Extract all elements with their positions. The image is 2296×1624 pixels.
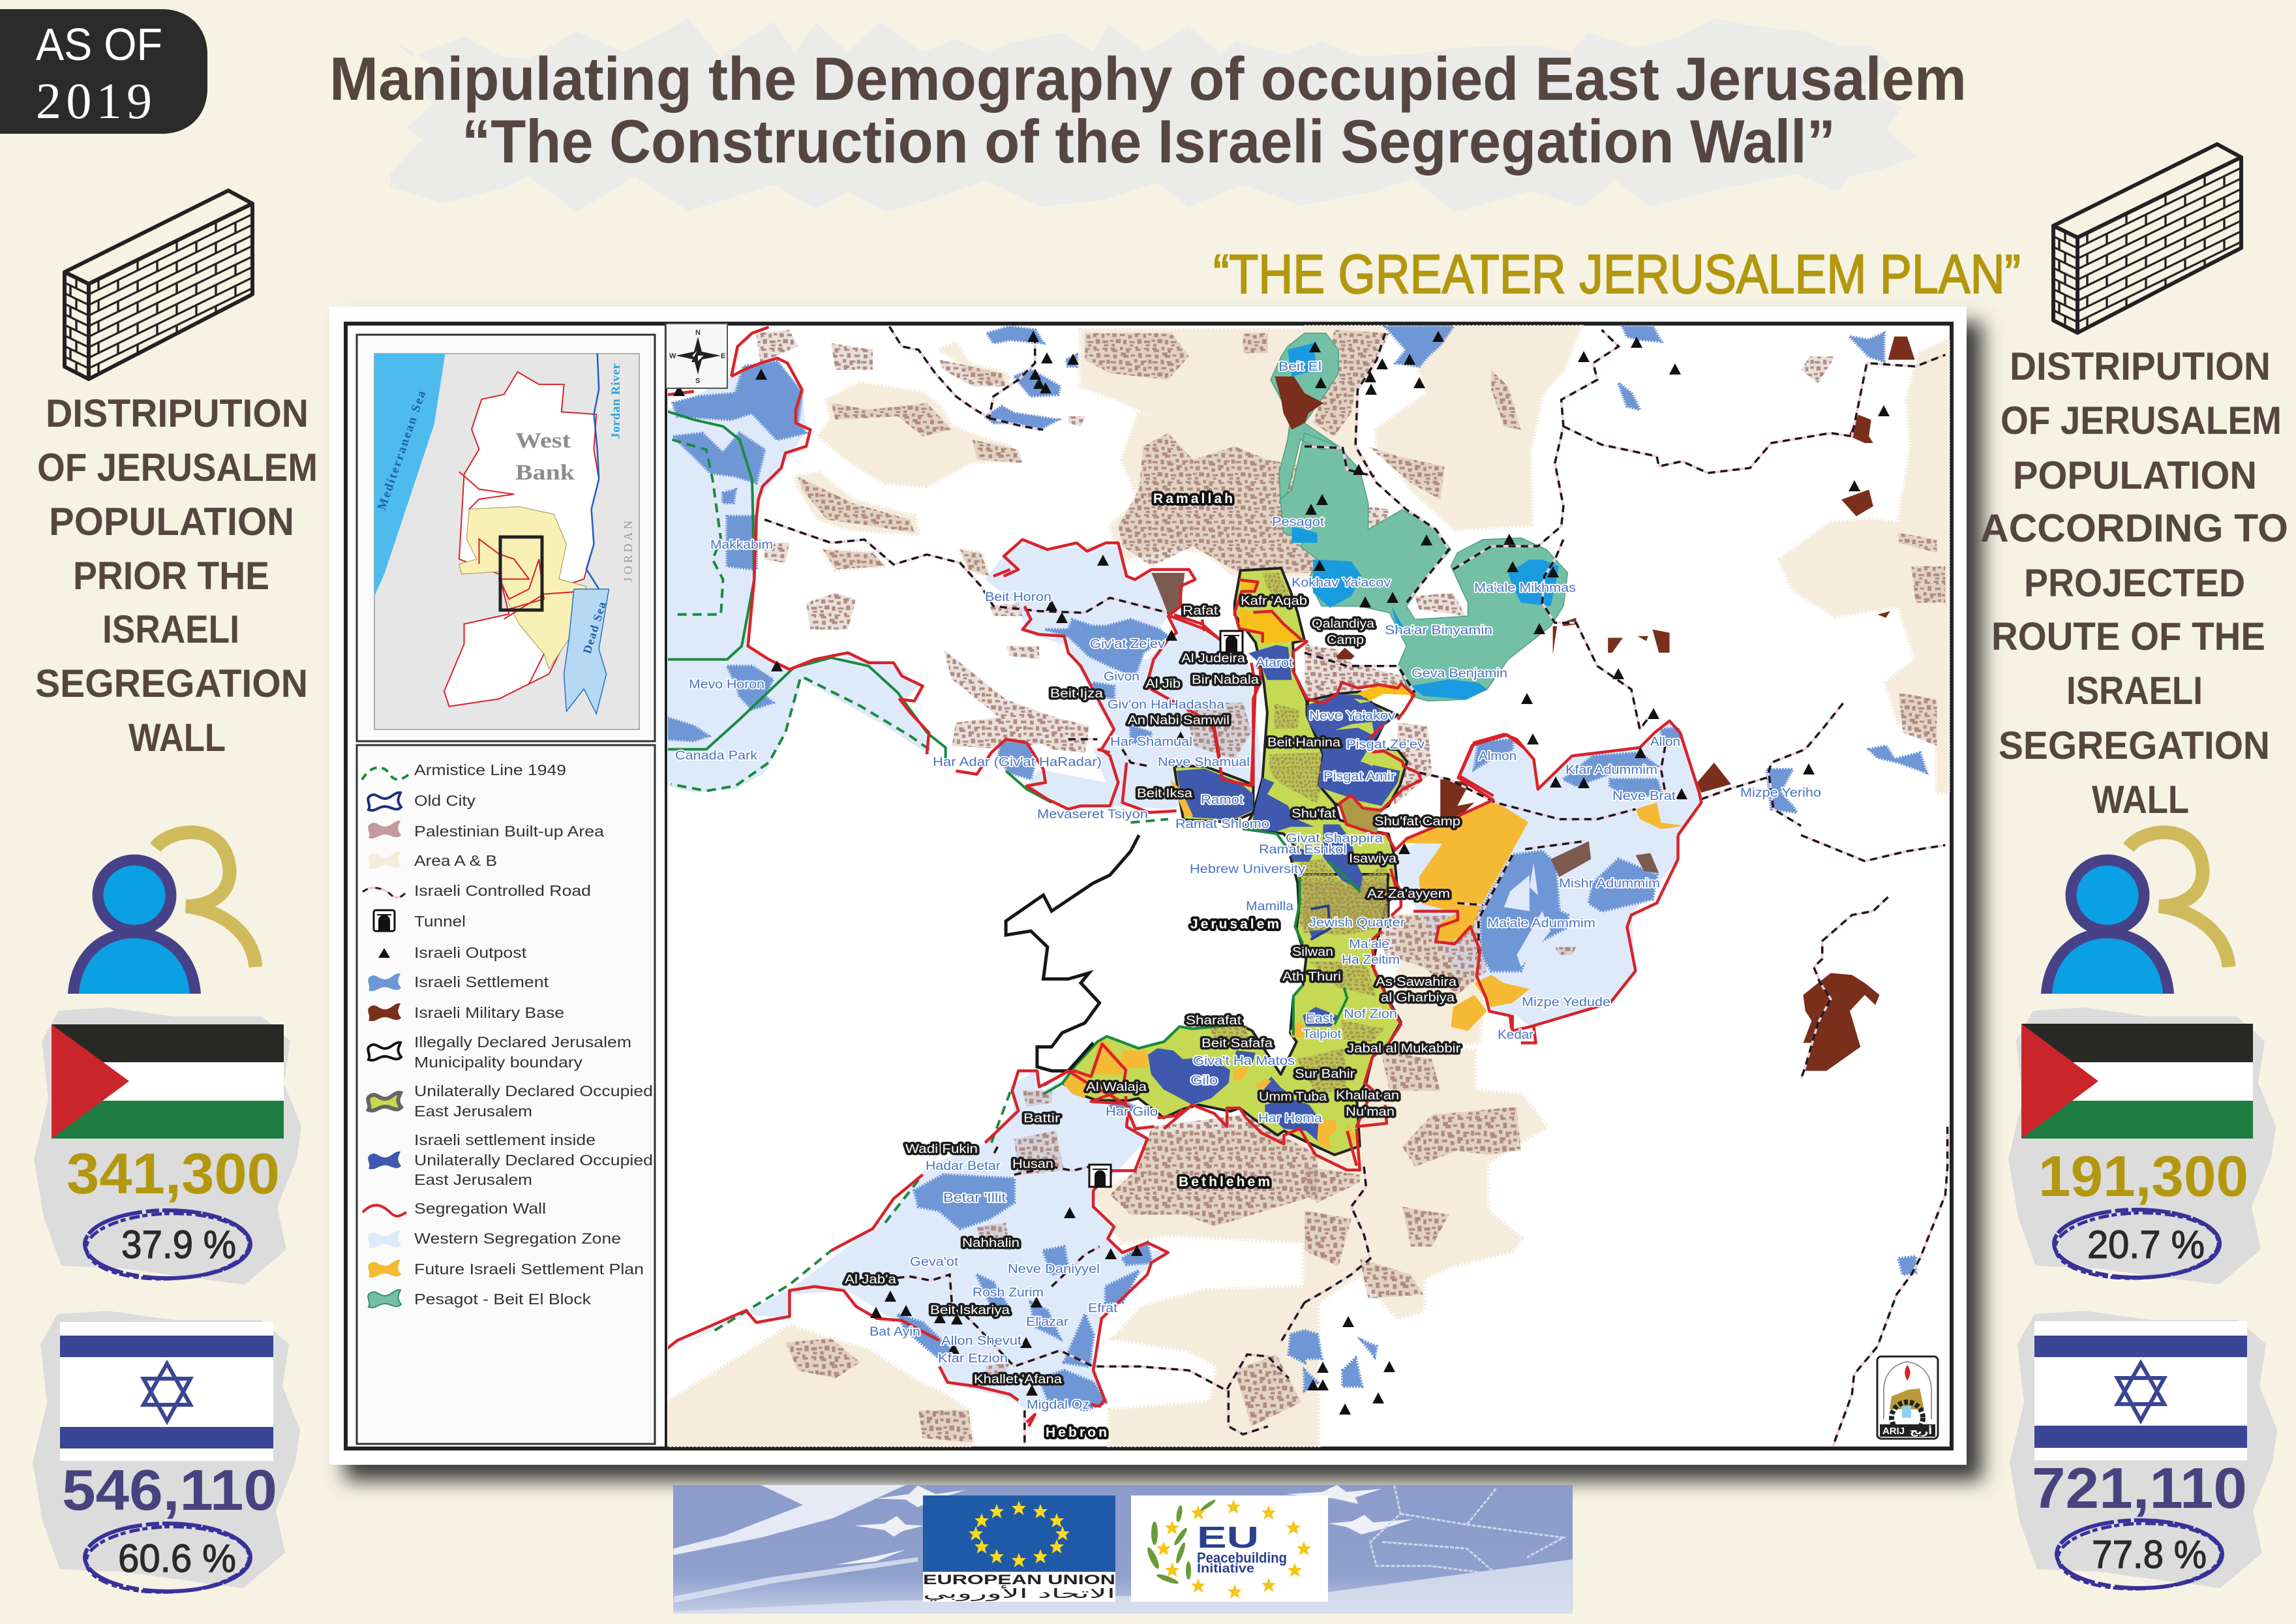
logo: EU Peacebuilding Initiative: Peacebuilding [1197, 1550, 1287, 1566]
legend: municipality [368, 1034, 631, 1071]
heading: left population block [35, 391, 318, 759]
legend: east Jerusalem: East Jerusalem [414, 1103, 532, 1120]
map: Palestinian locality labels: Al Jab'a [845, 1273, 896, 1287]
logo: European Union flag: الاتحاد الأوروبي [923, 1586, 1115, 1602]
map: settlement labels: Givon [1104, 670, 1140, 684]
map: future settlement plans [1063, 580, 1684, 1148]
map: Palestinian locality labels: Beit Iksa [1137, 787, 1192, 801]
map: settlement labels: Talpiot [1303, 1028, 1342, 1041]
map: settlement labels: Bat Ayin [869, 1325, 920, 1339]
legend: outpost [378, 944, 527, 961]
legend: old city: Old City [414, 792, 476, 809]
legend: Pesagot: Pesagot - Beit El Block [414, 1291, 592, 1308]
map: Israeli outposts [673, 331, 1890, 1415]
map: settlement labels: Allon [1650, 735, 1680, 749]
map: settlement labels: El'azar [1026, 1315, 1069, 1329]
map: city labels: Hebron [1046, 1425, 1107, 1440]
map: Pesagot - Beit El block [1271, 333, 1567, 701]
percent ring: 60.6 % [118, 1537, 236, 1580]
map: Palestinian locality labels: An Nabi Samwil [1128, 714, 1230, 728]
map: Palestinian locality labels: Qalandiya [1312, 617, 1374, 631]
icon: people left [68, 833, 256, 994]
map: western segregation zone [667, 360, 1701, 1411]
heading: right population block: ISRAELI [2066, 669, 2203, 712]
map: Palestinian locality labels: Sur Bahir [1295, 1067, 1355, 1081]
map: city labels [1046, 491, 1279, 1440]
date badge [0, 9, 207, 134]
icon: ARIJ logo: أريج [1910, 1425, 1932, 1437]
map card [329, 307, 1967, 1465]
heading: right population block: ACCORDING TO [1980, 506, 2288, 550]
map: settlement labels: Efrat [1088, 1302, 1118, 1315]
map: settlement labels: Giva't Ha Matos [1193, 1054, 1295, 1068]
map: Palestinian locality labels: Battir [1023, 1112, 1061, 1126]
map: settlement labels: Neve Shamual [1158, 756, 1250, 769]
map: settlement labels: Kokhav Ya'acov [1292, 576, 1391, 590]
map: settlement labels: Ramot [1201, 793, 1244, 807]
map [668, 325, 1950, 1582]
icon: brick wall left [65, 191, 252, 379]
number: Israeli population prior: 546,110 [62, 1458, 277, 1522]
panel: right Palestinian population [2008, 1007, 2276, 1285]
legend: area A and B [368, 851, 497, 869]
map: settlement labels: Giv'at Ze'ev [1090, 637, 1166, 651]
percent ring [85, 1524, 250, 1595]
map: Palestinian locality labels: Jabal al Mukabbir [1347, 1042, 1461, 1056]
icon: tunnel near Husan [1089, 1165, 1111, 1187]
map: Palestinian locality labels: Az Za'ayyem [1367, 887, 1450, 901]
percent ring [2054, 1210, 2220, 1281]
map: Palestinian locality labels: Shu'fat [1292, 807, 1337, 821]
title: “The Construction of the Israeli Segregation Wall” [462, 107, 1835, 176]
legend: settlement: Israeli Settlement [414, 973, 549, 990]
heading: left population block: DISTRIPUTION [46, 391, 309, 435]
icon: ARIJ logo [1877, 1356, 1938, 1439]
map: city labels: Jerusalem [1190, 917, 1279, 932]
legend: western zone [368, 1230, 621, 1248]
Jerusalem governorate [459, 507, 586, 669]
panel: right Israeli population [2010, 1311, 2277, 1591]
legend: controlled road [363, 882, 591, 899]
legend: wall [363, 1200, 546, 1217]
map: settlement labels: Pisgat Ze'ev [1346, 738, 1425, 752]
map: Palestinian locality labels: Beit Ijza [1050, 687, 1104, 701]
map: Palestinian locality labels: Khallet 'Afana [974, 1373, 1062, 1387]
map: settlement labels: Migdal Oz [1027, 1398, 1089, 1412]
date badge: AS OF [36, 19, 162, 70]
legend: western zone: Western Segregation Zone [414, 1230, 621, 1247]
legend: future plan: Future Israeli Settlement Plan [414, 1261, 644, 1278]
legend: armistice [362, 761, 566, 780]
map: settlement labels: Hadar Betar [926, 1159, 1001, 1173]
heading: right population block: SEGREGATION [1999, 724, 2270, 767]
map: Palestinian locality labels: Beit Safafa [1201, 1037, 1273, 1050]
map: Palestinian locality labels: Husan [1012, 1157, 1053, 1171]
heading: left population block: SEGREGATION [35, 662, 308, 705]
flag: Israel [2034, 1321, 2247, 1460]
panel: inset locator map: Mediterranean Sea [375, 389, 429, 512]
panel: inset locator map: Bank [515, 461, 575, 485]
map: Palestinian locality labels: Wadi Fukin [905, 1142, 978, 1156]
map: Palestinian locality labels: Al Walaja [1086, 1080, 1147, 1094]
Dead Sea [564, 589, 609, 714]
map: settlement labels: Atarot [1256, 656, 1293, 670]
heading: left population block: WALL [128, 716, 226, 759]
map: settlement labels: Mevaseret Tsiyon [1037, 808, 1148, 821]
map: Palestinian locality labels: Beit Hanina [1267, 736, 1340, 750]
flag: Palestine [52, 1024, 284, 1139]
map: Palestinian locality labels: Nahhalin [962, 1236, 1020, 1250]
map: light green patch inside Neve Ya'akov [1335, 699, 1400, 769]
heading: left population block: OF JERUSALEM [37, 446, 318, 489]
map: settlement labels: Allon Shevut [941, 1334, 1022, 1348]
wall route [459, 472, 579, 684]
legend: tunnel [374, 910, 466, 931]
map: segregation wall [667, 327, 1701, 1426]
legend: Pesagot [368, 1290, 592, 1308]
panel: inset locator map: Dead Sea [581, 600, 609, 655]
map: settlement labels: Neve Brat [1612, 789, 1676, 803]
heading: right population block: ROUTE OF THE [1991, 615, 2265, 658]
heading: left population block: PRIOR THE [73, 554, 269, 598]
map: settlement labels: Makkabim [710, 538, 773, 552]
map: Jewish Quarter old city outline [1311, 906, 1330, 940]
number: Palestinian population prior: 341,300 [67, 1141, 280, 1206]
title [329, 44, 1967, 176]
flag: Palestine [2021, 1024, 2253, 1139]
map: settlement labels: Hebrew University [1190, 863, 1306, 876]
panel: inset locator map: West [515, 429, 571, 453]
map: Shu'fat Camp olive block [1340, 795, 1382, 834]
map: settlement labels: Ha Zeitim [1342, 953, 1400, 967]
map: settlement labels: Givat Shappira [1286, 832, 1383, 846]
map: settlement labels: East [1306, 1012, 1334, 1026]
map: settlement labels: Har Shamual [1110, 735, 1192, 749]
title backdrop brush [390, 18, 1918, 212]
map: settlement labels: Mevo Horon [689, 678, 764, 692]
map: settlement labels: Ma'ale Adummim [1487, 917, 1595, 930]
map: Palestinian locality labels: Sharafat [1186, 1014, 1242, 1028]
legend: municipality: Illegally Declared Jerusalem [414, 1034, 631, 1050]
map: settlement labels: Har Adar (Giv'at HaRadar) [933, 756, 1102, 769]
icon: people right [2041, 833, 2229, 994]
map: Palestinian locality labels: Rafat [1183, 604, 1218, 618]
map: settlement labels: Mizpe Yeriho [1740, 786, 1821, 800]
icon: brick wall right [2053, 144, 2241, 333]
panel: inset locator map: JORDAN [622, 521, 635, 582]
map: settlement labels: Jewish Quarter [1309, 916, 1406, 930]
map: settlement labels: Rosh Zurim [973, 1286, 1044, 1300]
map: settlement labels: Ramat Shlomo [1175, 818, 1269, 831]
heading: right population block [1980, 345, 2288, 821]
map: settlement labels: Kfar Etzion [938, 1352, 1008, 1366]
map: Palestinian locality labels: Shu'fat Camp [1374, 815, 1460, 829]
map: settlement labels: Har Homa [1258, 1112, 1322, 1126]
map: settlement labels: Pisgat Amir [1323, 770, 1396, 784]
panel: legend [357, 324, 666, 1448]
map: settlement labels: Ma'ale Mikhmas [1474, 581, 1576, 595]
map: light cut-outs in Ma'ale Adummim [1504, 863, 1550, 967]
map: settlements inside east Jerusalem [1148, 645, 1400, 1142]
map: Palestinian built-up areas [756, 330, 1945, 1443]
map: settlement labels: Sha'ar Binyamin [1385, 624, 1492, 637]
map: settlement labels: Beit Horon [985, 590, 1051, 604]
heading: right population block: WALL [2092, 778, 2189, 821]
number: Palestinian population projected: 191,300 [2038, 1144, 2248, 1208]
map: settlement labels: Almon [1479, 750, 1517, 763]
legend: area A and B: Area A & B [414, 852, 497, 869]
map: east Jerusalem olive patches [1208, 573, 1389, 1092]
legend: settlement inside: East Jerusalem [414, 1171, 532, 1188]
panel: inset locator map: Jordan River [609, 363, 623, 439]
map: settlement labels: Mishr Adummim [1559, 877, 1660, 891]
map: military bases [1151, 337, 1915, 1071]
number: Israeli population projected: 721,110 [2032, 1456, 2247, 1520]
title: Manipulating the Demography of occupied East Jerusalem [329, 44, 1967, 113]
logo: EU Peacebuilding Initiative [1131, 1495, 1328, 1602]
legend: military base: Israeli Military Base [414, 1004, 564, 1021]
legend: future plan [368, 1260, 644, 1278]
map: Israeli settlements [667, 326, 1926, 1411]
map: Palestinian locality labels: As Sawahira [1376, 975, 1457, 989]
date badge: 2019 [36, 72, 152, 129]
legend: tunnel: Tunnel [414, 913, 466, 930]
percent ring: 20.7 % [2087, 1223, 2205, 1266]
map: settlement labels: Betar 'Illit [943, 1191, 1006, 1205]
map: Palestinian locality labels: Al Jib [1145, 677, 1181, 691]
logo: European Union flag [923, 1495, 1115, 1602]
map: settlement labels: Giv'on HaHadasha [1108, 698, 1224, 712]
map: Palestinian locality labels: Al Judeira [1181, 652, 1245, 666]
map: settlement labels: Ramat Eshkol [1259, 843, 1346, 857]
map: settlement labels: Neve Ya'akov [1309, 709, 1396, 723]
map: Palestinian locality labels: Khallat an [1336, 1089, 1399, 1103]
locator box [500, 537, 542, 610]
subtitle: the greater Jerusalem plan: “THE GREATER JERUSALEM PLAN” [1213, 243, 2021, 305]
map: Palestinian locality labels: Camp [1327, 634, 1364, 647]
banner: EU footer [673, 1485, 1573, 1614]
West Bank outline [444, 372, 599, 707]
map: settlement labels: Nof Zion [1344, 1007, 1397, 1021]
legend: municipality: Municipality boundary [414, 1054, 583, 1071]
Jordan River [586, 354, 599, 589]
map: settlement labels: Geva'ot [910, 1255, 959, 1269]
map: settlement labels: Kfar Adummim [1565, 763, 1657, 777]
heading: right population block: PROJECTED [2024, 561, 2245, 605]
map: settlement labels: Beit El [1278, 360, 1322, 374]
legend: old city [368, 792, 476, 810]
map: settlement labels: Pesagot [1272, 515, 1325, 529]
map: Palestinian locality labels: Beit Iskariya [930, 1304, 1010, 1317]
panel: left Palestinian population [34, 1007, 301, 1285]
legend: outpost: Israeli Outpost [414, 944, 527, 961]
map: Jerusalem municipality boundary [1006, 835, 1139, 1071]
legend: controlled road: Israeli Controlled Road [414, 882, 591, 899]
map: Palestinian locality labels: Silwan [1292, 945, 1333, 959]
icon: compass: W [669, 352, 676, 360]
map: Palestinian locality labels: Isawiya [1349, 852, 1397, 866]
legend: east Jerusalem [368, 1082, 653, 1120]
panel: left Israeli population [33, 1311, 300, 1595]
icon: compass: S [695, 377, 700, 385]
heading: right population block: DISTRIPUTION [2010, 345, 2271, 388]
map: settlement labels: Mamilla [1246, 900, 1293, 913]
map card shadow [329, 307, 1967, 1465]
map: Israeli controlled roads [764, 326, 1948, 1447]
logo: European Union flag: EUROPEAN UNION [923, 1572, 1115, 1587]
map: settlement labels: Kedar [1498, 1028, 1534, 1042]
icon: tunnel near Al Judeira [1220, 631, 1243, 652]
map: East Jerusalem base [1063, 568, 1407, 1155]
heading: left population block: ISRAELI [102, 607, 239, 651]
heading: right population block: POPULATION [2013, 453, 2257, 497]
icon: ARIJ logo: ARIJ [1882, 1426, 1905, 1437]
heading: left population block: POPULATION [49, 500, 294, 544]
map: city labels: Ramallah [1153, 491, 1233, 506]
legend: settlement inside [368, 1131, 653, 1188]
percent ring [2057, 1520, 2222, 1591]
icon: compass [666, 324, 727, 388]
map: city labels: Bethlehem [1179, 1174, 1270, 1189]
map: settlement labels: Ma'ale [1349, 938, 1389, 951]
map: settlement labels: Geva Benjamin [1412, 667, 1507, 681]
legend: military base [368, 1004, 564, 1021]
map: Palestinian locality labels: Kafr 'Aqab [1241, 594, 1307, 608]
legend: settlement [368, 973, 549, 991]
legend: settlement inside: Israeli settlement inside [414, 1131, 596, 1148]
map: Palestinian locality labels: Nu'man [1346, 1105, 1395, 1119]
legend: east Jerusalem: Unilaterally Declared Occupied [414, 1082, 653, 1099]
panel: inset locator map [357, 335, 655, 741]
legend: built-up: Palestinian Built-up Area [414, 823, 604, 840]
flag: Israel [60, 1322, 273, 1461]
map: Palestinian locality labels: Umm Tuba [1259, 1090, 1327, 1104]
legend: armistice: Armistice Line 1949 [414, 761, 566, 778]
map: Palestinian locality labels: al Gharbiya [1381, 991, 1455, 1005]
map: Palestinian locality labels: Bir Nabala [1192, 673, 1259, 687]
percent ring: 37.9 % [121, 1223, 236, 1266]
legend: settlement inside: Unilaterally Declared Occupied [414, 1152, 653, 1169]
map: settlement labels [675, 360, 1821, 1412]
map: settlement labels: Neve Daniyyel [1008, 1263, 1100, 1276]
legend: wall: Segregation Wall [414, 1200, 546, 1217]
sea [374, 354, 445, 596]
icon: compass: E [721, 352, 725, 360]
icon: compass: N [695, 329, 701, 337]
map: settlement labels: Mizpe Yedude [1522, 996, 1610, 1009]
percent ring: 77.8 % [2092, 1533, 2207, 1576]
map: Palestinian locality labels: Ath Thuri [1282, 970, 1341, 984]
map: settlement labels: Canada Park [675, 749, 758, 763]
map: area A and B [667, 326, 1948, 1447]
logo: EU Peacebuilding Initiative: EU [1197, 1520, 1259, 1554]
map: settlement labels: Gilo [1190, 1074, 1218, 1088]
legend: built-up [368, 821, 604, 840]
map: settlement labels: Har Gilo [1106, 1105, 1158, 1119]
logo: EU Peacebuilding Initiative: Initiative [1197, 1562, 1254, 1576]
map: Palestinian locality labels [845, 594, 1461, 1387]
map: Armistice line 1949 [667, 412, 1361, 1330]
percent ring [85, 1210, 250, 1281]
